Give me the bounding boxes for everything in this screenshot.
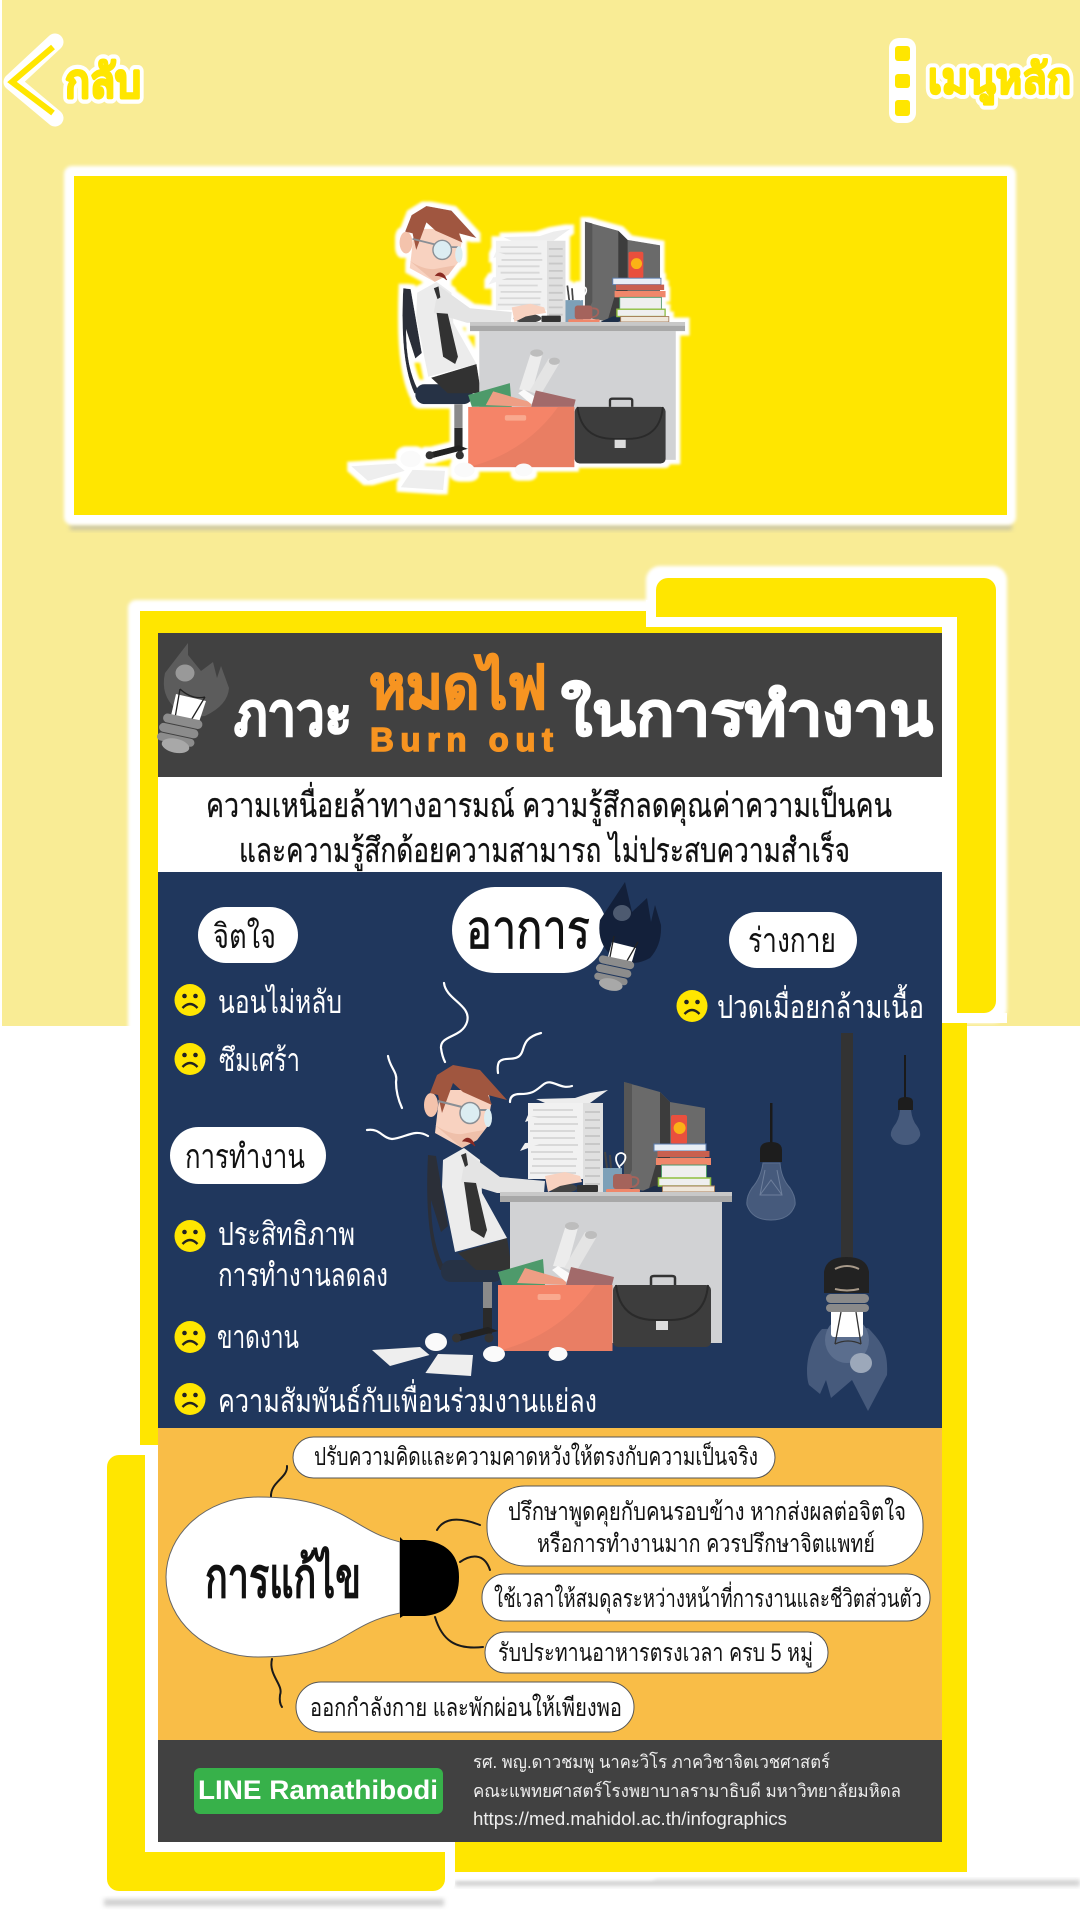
- panel: solutions: [158, 1428, 942, 1740]
- symptom: absence: ขาดงาน: [217, 1319, 299, 1355]
- icon: light bulb heading: การแก้ไข: [205, 1545, 361, 1609]
- back button: กลับ: [65, 55, 141, 107]
- connector lines: [271, 1466, 490, 1707]
- panel: title header: หมดไฟ: [369, 652, 547, 721]
- icon: hanging bulb: [747, 1103, 795, 1220]
- back button: [12, 42, 141, 118]
- panel: main frame: [128, 566, 1080, 1886]
- symptom: absence: [174, 1319, 299, 1355]
- illustration: overworked office worker: [372, 1065, 732, 1376]
- panel: title header: Burn out: [370, 721, 553, 758]
- main menu button: [889, 38, 1071, 123]
- solution: talk to others: [487, 1486, 923, 1566]
- symptom: insomnia: นอนไม่หลับ: [218, 984, 342, 1020]
- panel: definition: และความรู้สึกด้อยความสามารถ ไม่ประสบความสำเร็จ: [239, 830, 850, 871]
- credits: รศ. พญ.ดาวชมพู นาคะวิโร ภาควิชาจิตเวชศาสตร์: [473, 1751, 830, 1773]
- main menu button: เมนูหลัก: [928, 55, 1071, 105]
- solution: work life balance: [482, 1574, 930, 1621]
- page background: [2, 0, 1080, 1026]
- solution: talk to others: หรือการทำงานมาก ควรปรึกษาจิตแพทย์: [537, 1530, 875, 1558]
- icon: light bulb heading: [166, 1497, 459, 1657]
- panel: top illustration: [64, 166, 1016, 530]
- symptom: reduced efficiency: [174, 1216, 388, 1293]
- solution: adjust expectations: ปรับความคิดและความคาดหวังให้ตรงกับความเป็นจริง: [314, 1441, 758, 1471]
- symptom: muscle pain: [676, 984, 924, 1025]
- heading: symptoms: อาการ: [466, 900, 590, 960]
- label: body: ร่างกาย: [748, 922, 836, 960]
- label: work: การทำงาน: [185, 1138, 305, 1176]
- label: mind: [198, 907, 298, 963]
- symptom: reduced efficiency: ประสิทธิภาพ: [218, 1216, 355, 1252]
- solution: exercise and rest: ออกกำลังกาย และพักผ่อนให้เพียงพอ: [310, 1693, 622, 1722]
- symptom: muscle pain: ปวดเมื่อยกล้ามเนื้อ: [717, 984, 924, 1025]
- icon: small hanging bulb: [891, 1055, 920, 1145]
- symptom: reduced efficiency: การทำงานลดลง: [218, 1257, 388, 1293]
- solution: talk to others: ปรึกษาพูดคุยกับคนรอบข้าง หากส่งผลต่อจิตใจ: [508, 1497, 906, 1527]
- credits: https://med.mahidol.ac.th/infographics: [473, 1809, 787, 1829]
- back button: กลับ: [65, 55, 141, 107]
- icon: broken bulb: [154, 643, 229, 757]
- label: body: [729, 912, 857, 968]
- credits: [473, 1751, 901, 1829]
- panel: definition: [158, 777, 942, 872]
- symptom: poor relationships: ความสัมพันธ์กับเพื่อนร่วมงานแย่ลง: [218, 1379, 597, 1419]
- illustration: overworked office worker: [351, 206, 685, 490]
- icon: dark broken bulb: [592, 882, 661, 994]
- label: work: [170, 1127, 326, 1184]
- panel: symptoms: [158, 872, 942, 1428]
- heading: symptoms: [452, 887, 607, 973]
- symptom: depression: [174, 1042, 300, 1078]
- credits: คณะแพทยศาสตร์โรงพยาบาลรามาธิบดี มหาวิทยาลัยมหิดล: [473, 1780, 901, 1801]
- symptom: insomnia: [174, 984, 342, 1020]
- solution: work life balance: ใช้เวลาให้สมดุลระหว่างหน้าที่การงานและชีวิตส่วนตัว: [494, 1581, 922, 1614]
- panel: bottom left tab: [100, 1420, 455, 1906]
- icon: large broken bulb: [807, 1033, 887, 1411]
- badge: LINE Ramathibodi: LINE Ramathibodi: [198, 1775, 438, 1805]
- symptom: poor relationships: [174, 1379, 597, 1419]
- stress squiggles: [367, 983, 572, 1139]
- main menu button: เมนูหลัก: [928, 55, 1071, 105]
- symptom: depression: ซึมเศร้า: [219, 1042, 300, 1078]
- solution: exercise and rest: [296, 1682, 634, 1732]
- panel: footer: [158, 1740, 942, 1842]
- panel: definition: ความเหนื่อยล้าทางอารมณ์ ความรู้สึกลดคุณค่าความเป็นคน: [206, 782, 892, 826]
- panel: title header: ในการทำงาน: [561, 680, 933, 748]
- panel: title header: [154, 633, 942, 777]
- solution: regular meals: [485, 1632, 828, 1673]
- solution: adjust expectations: [293, 1437, 775, 1478]
- label: mind: จิตใจ: [213, 917, 276, 956]
- badge: LINE Ramathibodi: [194, 1768, 443, 1814]
- title text: ภาวะ: [234, 681, 352, 748]
- solution: regular meals: รับประทานอาหารตรงเวลา ครบ 5 หมู่: [498, 1639, 813, 1668]
